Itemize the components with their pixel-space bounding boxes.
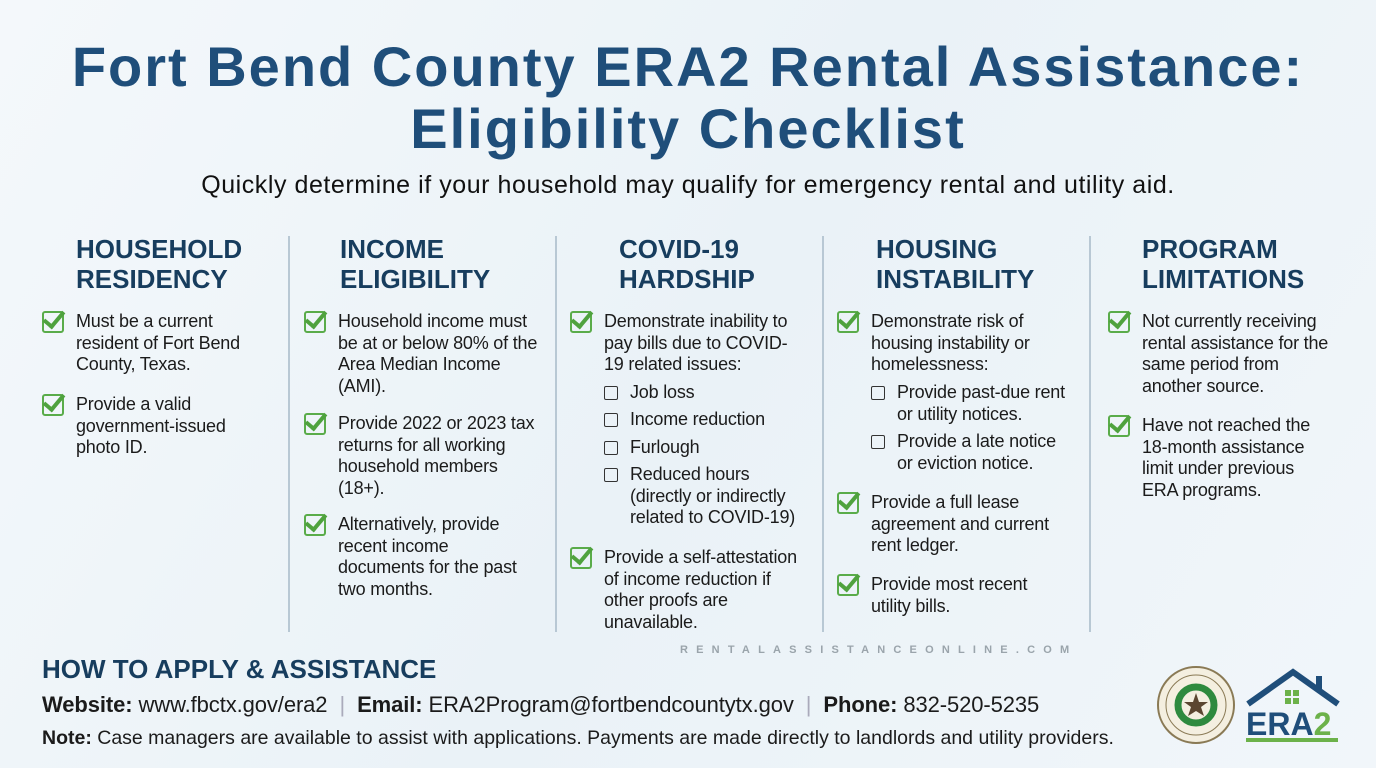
item [304,412,534,498]
item: Provide 2022 or 2023 tax [338,413,534,433]
item: same period from [1142,354,1279,374]
item: (AMI). [338,376,386,396]
heading [619,234,755,294]
section: how to apply [42,654,1114,749]
panel: program limitations [1108,234,1328,500]
heading: HOUSING [876,234,997,264]
subitem: related to COVID-19) [630,507,795,527]
item [570,546,797,632]
item: pay bills due to COVID- [604,332,787,352]
item: agreement and current [871,514,1049,534]
heading [876,234,1034,294]
item: Provide a full lease [871,492,1019,512]
icon: county seal [1157,666,1235,744]
subitem: (directly or indirectly [630,486,785,506]
item: Demonstrate inability to [604,311,787,331]
item: ERA programs. [1142,480,1261,500]
item: unavailable. [604,612,698,632]
subitem: Job loss [630,382,694,402]
item [570,310,787,374]
subitem [604,464,795,527]
subitem: Income reduction [630,409,765,429]
heading: COVID-19 [619,234,739,264]
item: housing instability or [871,332,1030,352]
heading: ELIGIBILITY [340,264,490,294]
item: Must be a current [76,311,213,331]
item: photo ID. [76,437,147,457]
item [837,574,1028,616]
subitem: or eviction notice. [897,452,1033,472]
item: Area Median Income [338,354,500,374]
item: government-issued [76,416,226,436]
subitem: Reduced hours [630,464,749,484]
heading: RESIDENCY [76,264,228,294]
item: two months. [338,578,433,598]
item [837,492,1049,555]
item: other proofs are [604,590,728,610]
item: 19 related issues: [604,354,741,374]
item: rent ledger. [871,535,959,555]
item: Provide a self-attestation [604,547,797,567]
item: utility bills. [871,596,950,616]
item: be at or below 80% of the [338,332,537,352]
title: Eligibility Checklist [410,97,966,160]
panel: covid-19 hardship [570,234,797,632]
subitem: Furlough [630,437,699,457]
item [1108,310,1328,396]
item [304,514,517,598]
heading: HARDSHIP [619,264,755,294]
item: Provide most recent [871,574,1027,594]
item [304,310,537,396]
heading [1142,234,1304,294]
item: resident of Fort Bend [76,332,240,352]
item: Not currently receiving [1142,311,1316,331]
subtitle: Quickly determine if your household may qualify for emergency rental and utility aid. [201,171,1175,199]
item: limit under previous [1142,458,1294,478]
subitem: Provide a late notice [897,431,1056,451]
heading [76,234,242,294]
item: County, Texas. [76,354,191,374]
subitem [871,431,1056,472]
item: Demonstrate risk of [871,311,1023,331]
item: 18-month assistance [1142,436,1304,456]
item [837,310,1030,374]
item: documents for the past [338,557,517,577]
heading [340,234,490,294]
item: Alternatively, provide [338,514,499,534]
panel: housing instability [837,234,1065,616]
heading: HOUSEHOLD [76,234,242,264]
title [72,35,1304,160]
item: Provide a valid [76,394,191,414]
icon: ERA2 logo [1246,668,1340,742]
item: recent income [338,536,448,556]
item: of income reduction if [604,568,771,588]
item: returns for all working [338,434,505,454]
heading: HOW TO APPLY & ASSISTANCE [42,654,436,684]
item [42,394,226,457]
item [1108,414,1310,500]
item: homelessness: [871,354,988,374]
heading: INSTABILITY [876,264,1034,294]
title: Fort Bend County ERA2 Rental Assistance: [72,35,1304,98]
panel: household residency [42,234,242,457]
heading: INCOME [340,234,444,264]
note: Note: Case managers are available to assist with applications. Payments are made directly to landlords and utility providers. [42,727,1114,749]
panel: income eligibility [304,234,537,598]
item: rental assistance for the [1142,332,1328,352]
item: another source. [1142,376,1264,396]
subitem: or utility notices. [897,404,1022,424]
heading: PROGRAM [1142,234,1278,264]
watermark: RENTALASSISTANCEONLINE.COM [680,644,1077,656]
item: Have not reached the [1142,415,1310,435]
subitem: Provide past-due rent [897,382,1065,402]
item: (18+). [338,478,384,498]
icon: ERA2 logo: ERA2 [1246,706,1331,742]
item: Household income must [338,311,527,331]
item: household members [338,456,498,476]
subitem [871,382,1065,424]
contact line: Website: www.fbctx.gov/era2 | Email: ERA2Program@fortbendcountytx.gov | Phone: 832-520-5235 [42,692,1039,717]
heading: LIMITATIONS [1142,264,1304,294]
item [42,310,240,374]
